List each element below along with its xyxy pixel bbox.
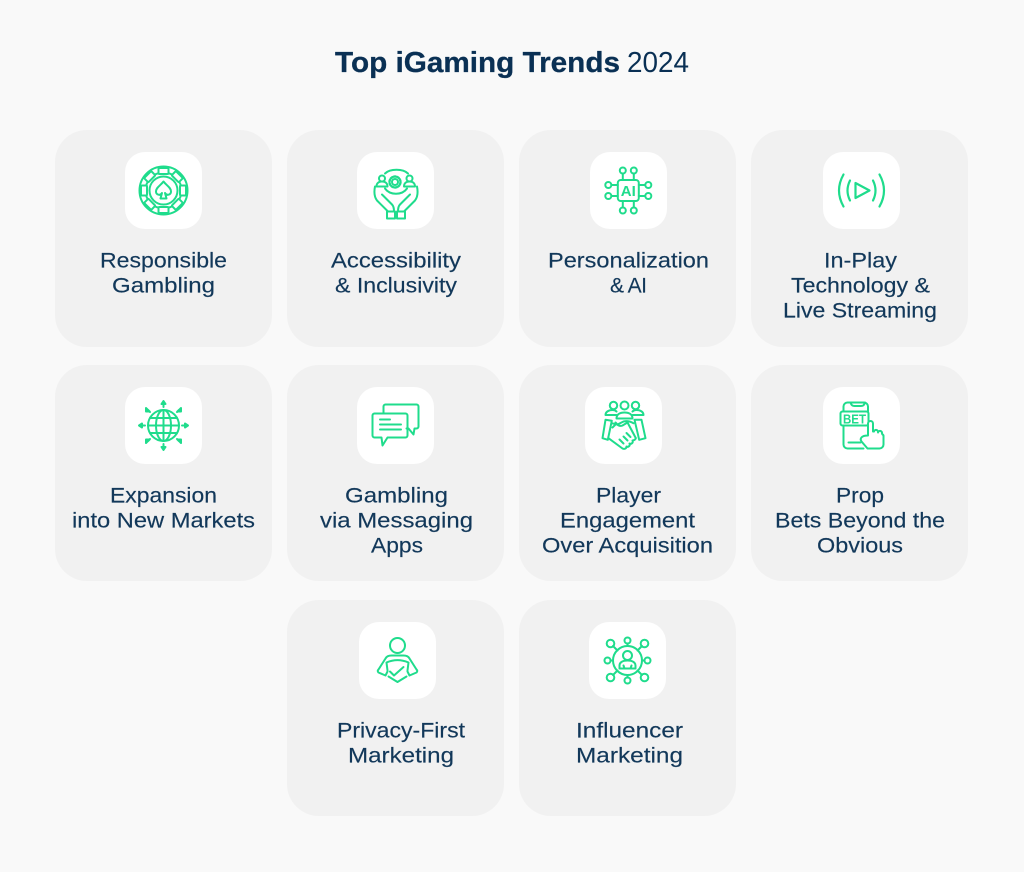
label [100,250,227,298]
icon: phone with BET and hand [840,402,884,448]
label: In-Play [824,250,898,272]
icon: globe with arrows [139,401,188,450]
label [337,720,465,768]
label [775,484,945,558]
panel: Influencer Marketing [519,600,736,816]
label: Marketing [348,744,454,768]
label: into New Markets [72,510,255,532]
label: Bets Beyond the [775,510,945,532]
title: 2024 [627,47,689,79]
label: Marketing [576,744,683,768]
label: & AI [610,274,647,298]
panel: Gambling via Messaging Apps [287,365,504,581]
label: Responsible [100,250,227,272]
label: Player [596,484,661,508]
label: Personalization [548,250,709,272]
label [72,484,255,532]
icon: AI chip [605,168,651,214]
label: Obvious [817,534,903,558]
label: Influencer [576,720,683,742]
panel: Prop Bets Beyond the Obvious [751,365,968,581]
panel: Accessibility & Inclusivity [287,130,504,347]
icon: AI chip: AI [621,183,636,200]
label: Gambling [345,484,448,508]
label: Over Acquisition [542,534,713,558]
label: Accessibility [331,250,462,272]
label: Engagement [560,510,695,532]
icon: casino chip with spade [140,166,188,214]
label: Live Streaming [783,300,937,322]
label [320,484,473,558]
panel: Responsible Gambling [55,130,272,347]
label: Technology & [791,274,930,298]
icon: influencer network [604,638,650,684]
icon: hands holding people and gear [374,170,418,218]
icon: people and handshake [602,402,646,449]
icon: phone with BET and hand: BET [843,412,866,426]
icon: live stream play [839,174,884,206]
panel: Expansion into New Markets [55,365,272,581]
label [783,250,937,322]
title: Top iGaming Trends [335,47,620,79]
icon: person with shield [378,638,417,682]
label [576,720,683,768]
panel: Personalization & AI [519,130,736,347]
label: via Messaging [320,510,473,532]
label: Expansion [110,484,217,508]
label: Privacy-First [337,720,465,742]
icon: chat bubbles [372,404,418,446]
panel: Player Engagement Over Acquisition [519,365,736,581]
panel: In-Play Technology & Live Streaming [751,130,968,347]
label [548,250,709,298]
label: Prop [836,484,884,508]
label [542,484,713,558]
label [331,250,462,298]
panel: Privacy-First Marketing [287,600,504,816]
label: Apps [371,534,423,558]
label: & Inclusivity [335,274,458,298]
label: Gambling [112,274,215,298]
